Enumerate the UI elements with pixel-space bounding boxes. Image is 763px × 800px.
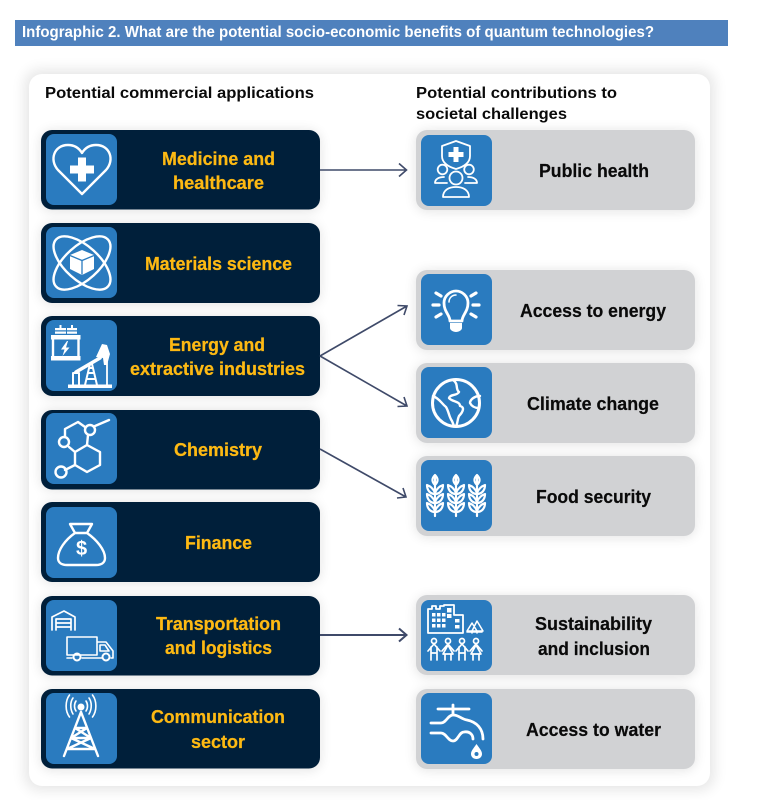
card: Access to water: Access to water bbox=[526, 720, 661, 740]
card: Public health bbox=[416, 130, 695, 210]
card: Energy and extractive industries: extractive industries bbox=[130, 359, 305, 379]
icon: molecule bbox=[56, 420, 109, 478]
card: Energy and extractive industries bbox=[41, 316, 320, 396]
card: Food security bbox=[416, 456, 695, 536]
arrow: chemistry to food security bbox=[320, 449, 406, 498]
card shadows bbox=[41, 131, 695, 770]
card: Finance bbox=[41, 502, 320, 582]
icon: water tap bbox=[431, 705, 483, 759]
card: Communication sector bbox=[41, 689, 320, 768]
card: Climate change: Climate change bbox=[527, 394, 659, 414]
icon: battery and pumpjack bbox=[51, 325, 112, 388]
card: Sustainability and inclusion: and inclusion bbox=[538, 639, 650, 659]
card: Access to water bbox=[416, 689, 695, 769]
icon: radio tower bbox=[64, 695, 98, 756]
card: Access to energy bbox=[416, 270, 695, 350]
card: Medicine and healthcare: Medicine and bbox=[162, 149, 275, 169]
card: Transportation and logistics: Transportation bbox=[156, 614, 281, 634]
card: Finance: Finance bbox=[185, 533, 252, 553]
heading: societal challenges bbox=[416, 85, 617, 123]
heading: commercial applications: Potential commercial applications bbox=[45, 85, 314, 102]
icon: three wheat stalks bbox=[427, 475, 485, 516]
card: Medicine and healthcare bbox=[41, 130, 320, 210]
card: Public health: Public health bbox=[539, 161, 649, 181]
icon: globe bbox=[432, 380, 480, 426]
card: Materials science bbox=[41, 223, 320, 303]
card: Chemistry bbox=[41, 410, 320, 490]
heading: societal challenges: Potential contributions to bbox=[416, 85, 617, 102]
card: Medicine and healthcare: healthcare bbox=[173, 173, 264, 193]
card: Transportation and logistics: and logistics bbox=[165, 638, 272, 658]
arrow: transportation to sustainability bbox=[320, 628, 406, 642]
icon: heart with cross bbox=[53, 145, 111, 194]
title bar bbox=[15, 20, 728, 46]
card: Transportation and logistics bbox=[41, 596, 320, 676]
card: Sustainability and inclusion: Sustainability bbox=[535, 614, 652, 634]
icon: light bulb bbox=[433, 291, 479, 332]
icon: money bag: $ bbox=[76, 538, 87, 560]
card: Materials science: Materials science bbox=[145, 254, 292, 274]
card: Access to energy: Access to energy bbox=[520, 301, 666, 321]
icon: atom with cube bbox=[45, 227, 119, 299]
icon: shield and people bbox=[435, 141, 477, 197]
card: Energy and extractive industries: Energy and bbox=[169, 335, 265, 355]
arrow: energy to climate change bbox=[320, 356, 407, 406]
title bar: Infographic 2. What are the potential socio-economic benefits of quantum technologies? bbox=[22, 24, 654, 41]
card: Food security: Food security bbox=[536, 487, 651, 507]
arrow: medicine to public health bbox=[320, 164, 406, 176]
card: Chemistry: Chemistry bbox=[174, 440, 262, 460]
card: Sustainability and inclusion bbox=[416, 595, 695, 675]
icon: city, trees and people bbox=[428, 605, 483, 660]
card: Climate change bbox=[416, 363, 695, 443]
card: Communication sector: Communication bbox=[151, 707, 285, 727]
arrow: energy to access to energy bbox=[320, 306, 407, 356]
heading: societal challenges: societal challenges bbox=[416, 106, 567, 123]
icon: warehouse and truck bbox=[52, 611, 113, 660]
card: Communication sector: sector bbox=[191, 732, 245, 752]
icon: money bag bbox=[58, 524, 105, 565]
